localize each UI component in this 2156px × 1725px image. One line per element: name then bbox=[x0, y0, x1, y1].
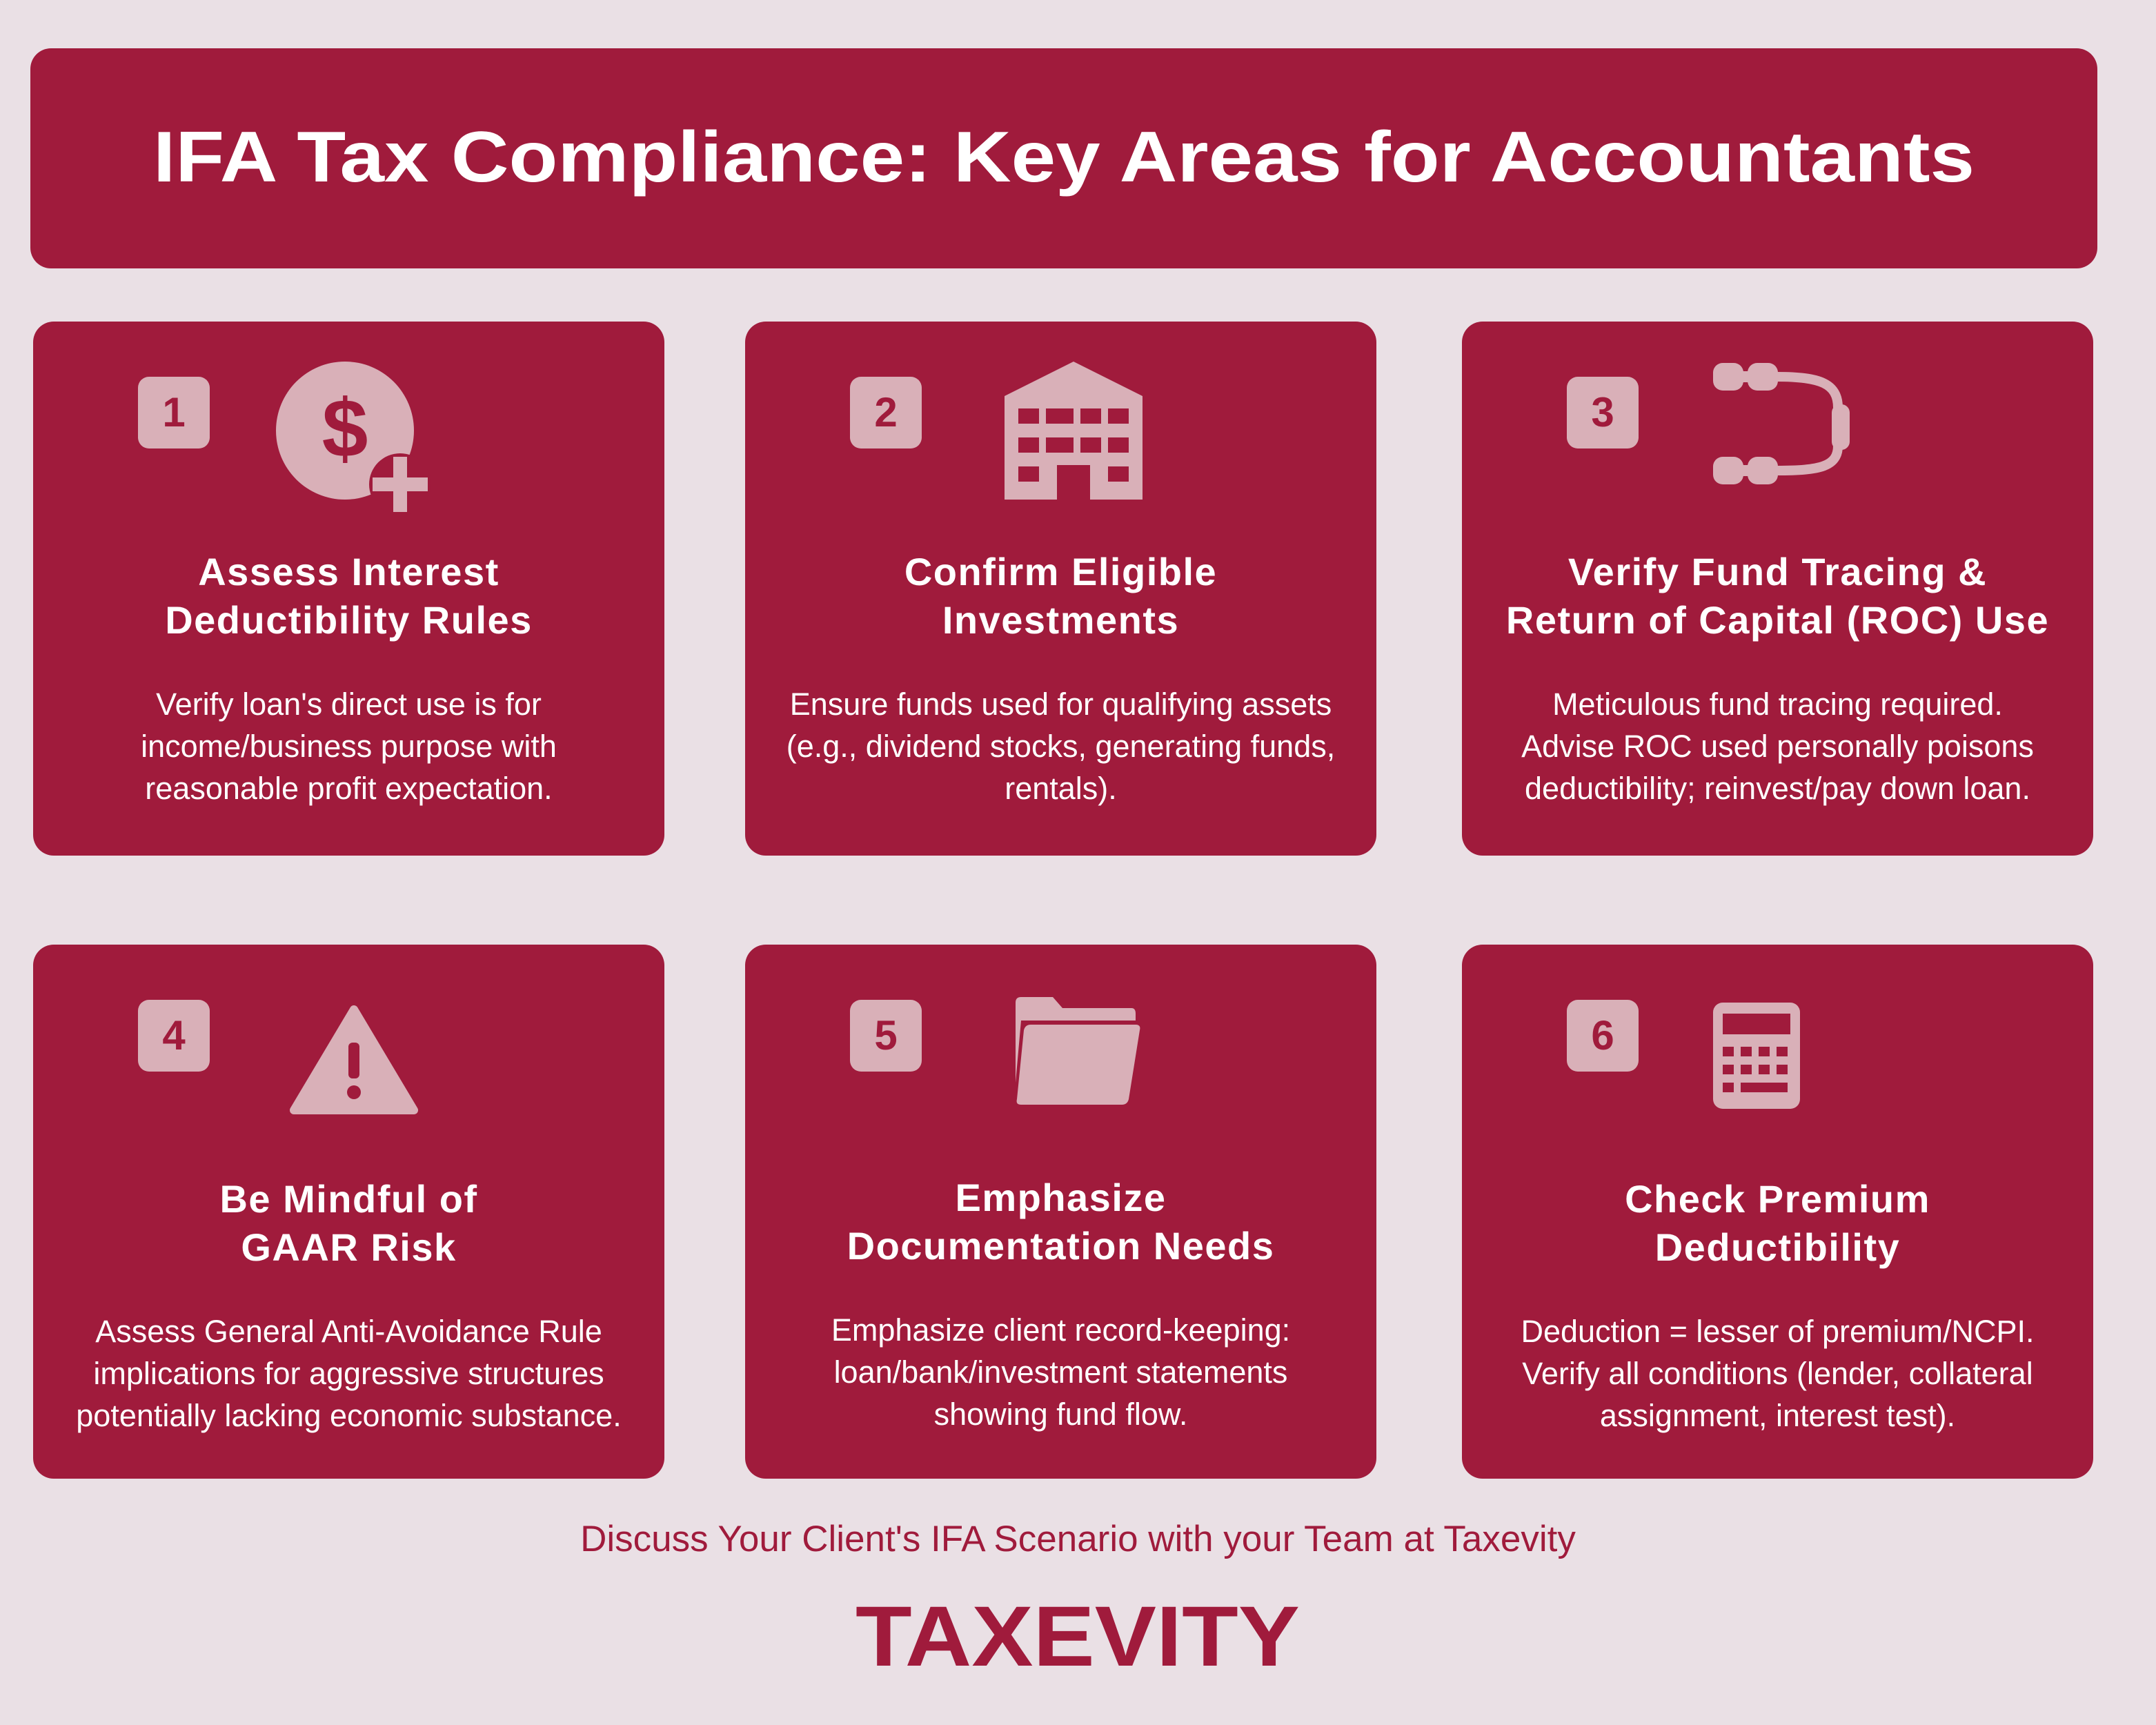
heading 5: Emphasize bbox=[955, 1176, 1167, 1219]
badge 5 bbox=[850, 1000, 922, 1072]
badge 3 bbox=[1567, 377, 1639, 448]
heading 1: Deductibility Rules bbox=[165, 598, 533, 642]
title banner bbox=[30, 48, 2097, 268]
text 3: deductibility; reinvest/pay down loan. bbox=[1525, 771, 2030, 806]
text 6: Deduction = lesser of premium/NCPI. Verify all conditions (lender, collateral assignment, interest test). bbox=[1521, 1314, 2035, 1433]
badge 6: 6 bbox=[1591, 1012, 1614, 1058]
panel: card 6 bbox=[1462, 945, 2093, 1479]
heading 2 bbox=[904, 550, 1217, 642]
icon: folder bbox=[1016, 997, 1140, 1105]
icon: dollar plus bbox=[276, 362, 428, 512]
heading 1 bbox=[165, 550, 533, 642]
heading 1: Assess Interest bbox=[198, 550, 500, 593]
heading 6 bbox=[1625, 1177, 1930, 1269]
heading 4 bbox=[219, 1177, 478, 1269]
heading 5 bbox=[847, 1176, 1274, 1268]
title: IFA Tax Compliance: Key Areas for Accountants bbox=[153, 117, 1975, 197]
heading 5: Documentation Needs bbox=[847, 1224, 1274, 1268]
icon: building bbox=[1005, 362, 1143, 500]
badge 1 bbox=[138, 377, 210, 448]
panel: card 3 bbox=[1462, 322, 2093, 856]
heading 4: GAAR Risk bbox=[241, 1225, 457, 1269]
text 5: Emphasize client record-keeping: loan/bank/investment statements showing fund flow. bbox=[831, 1312, 1290, 1432]
text 3: Meticulous fund tracing required. bbox=[1552, 687, 2003, 722]
panel: card 2 bbox=[745, 322, 1376, 856]
icon: warning bbox=[290, 1005, 418, 1114]
text 2: Ensure funds used for qualifying assets (e.g., dividend stocks, generating funds, rentals). bbox=[787, 687, 1335, 806]
text 3: Advise ROC used personally poisons bbox=[1521, 729, 2034, 764]
panel: card 5 bbox=[745, 945, 1376, 1479]
badge 4: 4 bbox=[162, 1012, 186, 1058]
badge 4 bbox=[138, 1000, 210, 1072]
panel: card 4 bbox=[33, 945, 664, 1479]
panel: card 1 bbox=[33, 322, 664, 856]
icon: fund tracing pipeline bbox=[1713, 363, 1850, 484]
heading 3 bbox=[1506, 550, 2049, 642]
heading 2: Confirm Eligible bbox=[904, 550, 1217, 593]
text 4: Assess General Anti-Avoidance Rule implications for aggressive structures potentially lacking economic substance. bbox=[76, 1314, 622, 1433]
footer call to action: Discuss Your Client's IFA Scenario with your Team at Taxevity bbox=[580, 1519, 1576, 1559]
badge 5: 5 bbox=[874, 1012, 898, 1058]
badge 6 bbox=[1567, 1000, 1639, 1072]
badge 2: 2 bbox=[874, 389, 898, 435]
heading 4: Be Mindful of bbox=[219, 1177, 478, 1221]
badge 3: 3 bbox=[1591, 389, 1614, 435]
heading 3: Verify Fund Tracing & bbox=[1568, 550, 1987, 593]
heading 6: Deductibility bbox=[1655, 1225, 1900, 1269]
badge 1: 1 bbox=[162, 389, 186, 435]
icon: calculator bbox=[1713, 1003, 1800, 1109]
icon: dollar plus: $ bbox=[322, 382, 368, 475]
heading 3: Return of Capital (ROC) Use bbox=[1506, 598, 2049, 642]
badge 2 bbox=[850, 377, 922, 448]
heading 2: Investments bbox=[942, 598, 1179, 642]
heading 6: Check Premium bbox=[1625, 1177, 1930, 1221]
text 1: Verify loan's direct use is for income/business purpose with reasonable profit expectation. bbox=[141, 687, 557, 806]
text 3 bbox=[1521, 687, 2034, 806]
